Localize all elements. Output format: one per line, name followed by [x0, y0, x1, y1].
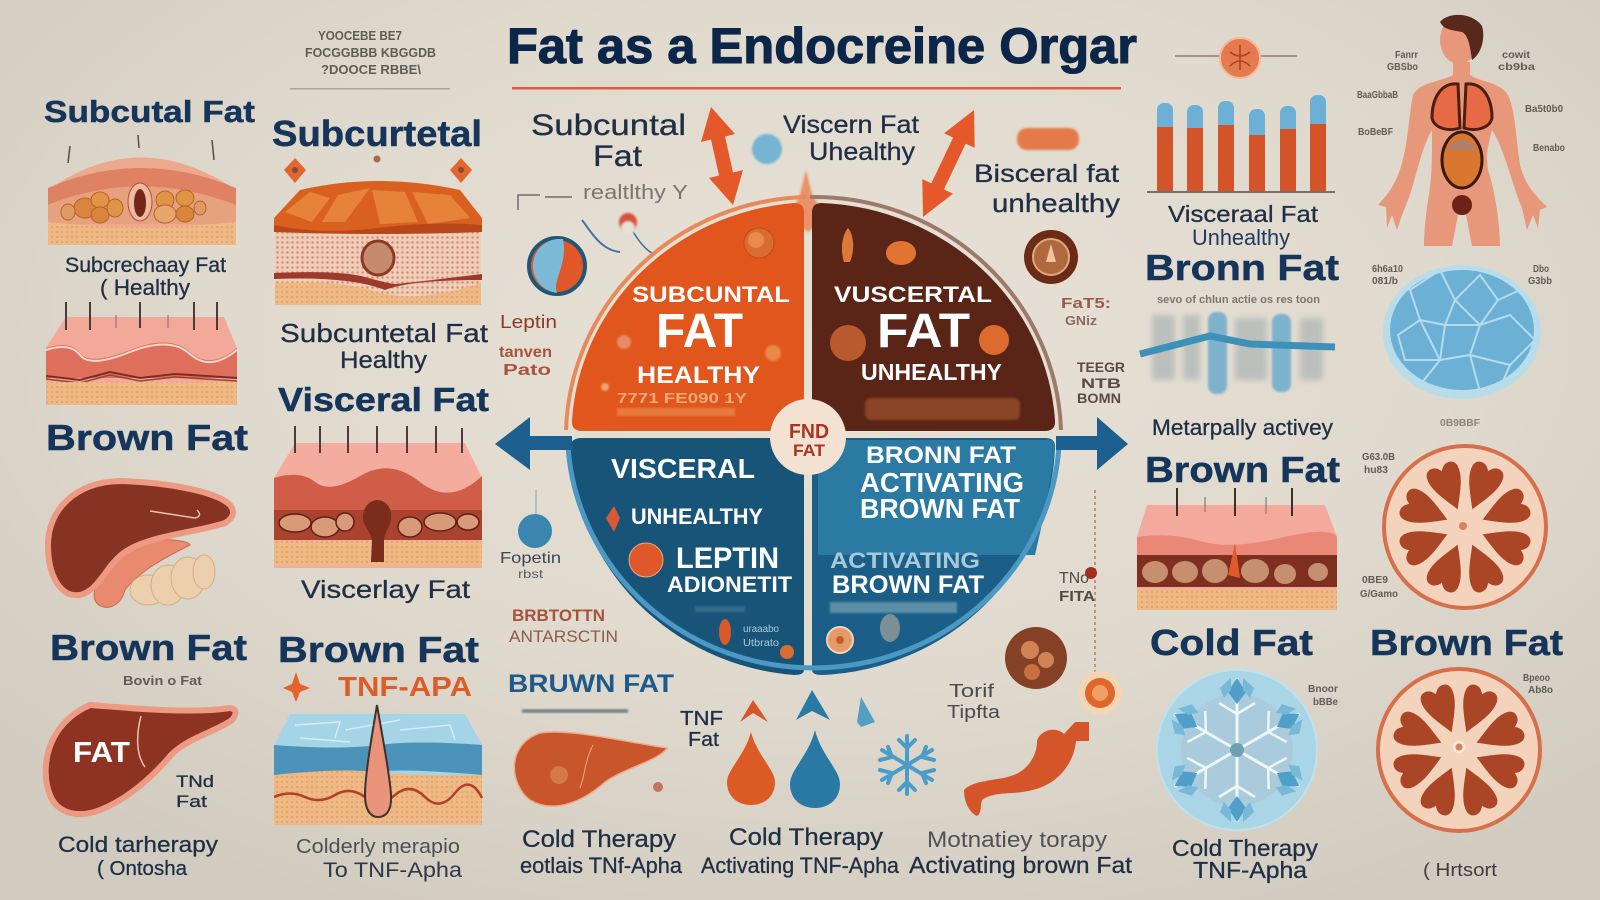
caption: To TNF-Apha — [323, 859, 462, 882]
ring top — [566, 197, 1061, 430]
small labels: citrus upper: hu83 — [1364, 465, 1388, 476]
line chart — [1140, 312, 1335, 394]
quadrant: brown fat activating: BROWN FAT — [832, 571, 984, 599]
panel: left column one — [44, 94, 255, 880]
small labels: snow disc: Bnoor — [1308, 684, 1338, 695]
label: tnf-apa — [283, 671, 472, 702]
small labels: figure: Fanrr — [1395, 50, 1418, 61]
small labels: blue cells: G3bb — [1528, 276, 1552, 287]
caption: metabolic therapy: Motnatiey torapy — [927, 827, 1107, 852]
labels: left leptin: Pato — [503, 362, 551, 379]
small labels: snow disc: Bpeoo — [1523, 673, 1550, 684]
caption: cold therapy — [58, 832, 218, 880]
caption: cold therapy one — [520, 826, 683, 878]
icon: orange liver — [514, 732, 667, 806]
icon: blue snowflake — [880, 736, 934, 794]
small labels: figure: cowit — [1502, 50, 1531, 61]
caption: Colderly merapio — [296, 836, 460, 858]
icon: blue and orange sphere — [529, 238, 585, 294]
icon: blue ball with label: Fopetin — [500, 550, 561, 567]
caption: Visceraal Fat — [1168, 201, 1319, 227]
caption — [296, 836, 462, 882]
label: torif tipfta — [947, 681, 1001, 722]
label: viscern fat: Uhealthy — [809, 138, 916, 166]
label: subcuntal fat — [531, 109, 686, 173]
icon: liver labelled fat: FAT — [73, 737, 130, 769]
small header text: YOOCEBE BE7 — [318, 28, 402, 43]
small header text — [290, 28, 450, 90]
small labels: blue cells: 081/b — [1372, 276, 1398, 287]
quadrant: subcuntal fat healthy: SUBCUNTAL — [632, 282, 790, 307]
label: viscern fat: Viscern Fat — [783, 111, 919, 139]
caption: ( Healthy — [100, 275, 190, 300]
caption: TNF-Apha — [1193, 857, 1307, 883]
panel: center top labels — [499, 107, 1125, 406]
icon: domed tissue cross-section — [48, 135, 236, 245]
labels: right fat notes: FaT5: — [1061, 295, 1111, 312]
center medallion — [770, 399, 846, 475]
heading: cold fat: Cold Fat — [1150, 622, 1313, 663]
icon: orange smudge — [1017, 128, 1079, 150]
quadrant: subcuntal fat healthy — [572, 203, 804, 431]
label: tnf-apa: TNF-APA — [338, 671, 472, 702]
small labels: blue cells: Dbo — [1533, 264, 1549, 275]
heading: visceral fat: Visceral Fat — [278, 381, 489, 418]
small label: tnd fat: TNd — [176, 772, 214, 791]
panel: right column one — [1137, 38, 1340, 883]
quadrant: brown fat activating: BRONN FAT — [866, 442, 1016, 469]
quadrant: brown fat activating — [812, 438, 1055, 675]
labels: right fat notes: NTB — [1081, 375, 1121, 391]
small labels: citrus upper: G63.0B — [1362, 452, 1395, 463]
labels: brotottin: BRBTOTTN — [512, 606, 605, 625]
caption: Subcrechaay Fat — [65, 254, 226, 277]
chart: central fat wheel — [566, 197, 1061, 675]
labels: right fat notes: BOMN — [1077, 390, 1121, 406]
label: subcuntal fat: Fat — [593, 140, 643, 173]
heading: bruwn fat: BRUWN FAT — [508, 670, 674, 698]
labels: left leptin — [499, 312, 557, 379]
caption — [1168, 201, 1319, 250]
icon: blue ball with label — [500, 490, 561, 581]
label: tnf fat: TNF — [680, 708, 723, 730]
center medallion: FAT — [793, 441, 826, 460]
small label: tnd fat — [176, 772, 214, 811]
icon: visceral tissue — [274, 426, 482, 568]
icon: blue ball with label: rbst — [518, 567, 544, 581]
icon: citrus-like fat section lower — [1378, 669, 1540, 831]
quadrant: viscertal fat unhealthy: FAT — [877, 305, 970, 358]
small label: Bovin o Fat — [123, 673, 203, 688]
heading: bronn fat: Bronn Fat — [1145, 247, 1339, 288]
quadrant: subcuntal fat healthy: HEALTHY — [637, 362, 760, 389]
small labels: blue cells — [1372, 264, 1552, 429]
quadrant: visceral unhealthy leptin: Utbrato — [743, 638, 779, 649]
icon: orange drop — [727, 732, 775, 805]
heading: brown fat: Brown Fat — [1145, 449, 1340, 490]
heading: brown fat: Brown Fat — [46, 417, 248, 458]
label: torif tipfta: Torif — [949, 681, 995, 701]
quadrant: viscertal fat unhealthy: UNHEALTHY — [861, 359, 1002, 385]
small labels: citrus upper: 0BE9 — [1362, 575, 1388, 586]
caption — [65, 254, 226, 300]
small labels: blue cells: 6h6a10 — [1372, 264, 1403, 275]
bar chart — [1147, 95, 1335, 193]
labels: right fat notes: GNiz — [1065, 313, 1098, 328]
quadrant: brown fat activating: BROWN FAT — [860, 493, 1020, 524]
small header text: FOCGGBBB KBGGDB — [305, 45, 436, 60]
icon: dotted stem with ring — [1059, 490, 1122, 715]
icon: blue fat cells — [1383, 265, 1541, 399]
caption: Metarpally activey — [1152, 415, 1333, 440]
faded healthy sketch — [518, 182, 688, 255]
quadrant: visceral unhealthy leptin: VISCERAL — [611, 453, 755, 484]
heading: subcutal fat: Subcutal Fat — [44, 94, 255, 129]
icon: tissue with hairs — [1137, 488, 1337, 610]
small header text: ?DOOCE RBBE\ — [321, 62, 421, 77]
small labels: snow disc: Ab8o — [1528, 685, 1553, 696]
panel: right column two — [1308, 15, 1565, 880]
small labels: citrus upper — [1360, 452, 1398, 600]
icon: orange tissue cross-section — [274, 181, 482, 305]
label: subcuntal fat: Subcuntal — [531, 109, 686, 142]
small labels: figure: Benabo — [1533, 143, 1565, 154]
quadrant: visceral unhealthy leptin: uraaabo — [743, 624, 779, 635]
faded healthy sketch: realtlthy Y — [583, 182, 688, 204]
icon: brown medallion lower — [1005, 627, 1067, 689]
title: Fat as a Endocreine Orgar — [507, 18, 1137, 74]
small labels: figure: BoBeBF — [1358, 127, 1393, 138]
caption: metabolic therapy — [909, 827, 1133, 878]
quadrant: viscertal fat unhealthy — [812, 203, 1055, 431]
small label: tnd fat: Fat — [176, 792, 207, 811]
quadrant: subcuntal fat healthy: FAT — [656, 305, 743, 358]
small labels: snow disc: bBBe — [1313, 697, 1338, 708]
caption: Viscerlay Fat — [301, 576, 470, 604]
caption — [1172, 835, 1319, 883]
labels: brotottin: ANTARSCTIN — [509, 627, 618, 646]
icon: human figure with organs — [1378, 15, 1547, 246]
heading: subcurtetal: Subcurtetal — [272, 113, 482, 154]
label: bisceral fat — [974, 160, 1120, 218]
small labels: snow disc — [1308, 673, 1553, 708]
icon: brown medallion — [1024, 230, 1078, 284]
heading: bruwn fat — [508, 670, 674, 713]
panel: center bottom — [500, 490, 1133, 878]
quadrant: visceral unhealthy leptin: LEPTIN — [676, 542, 779, 575]
icon: snowflake disc — [1157, 670, 1317, 830]
caption: cold therapy: Cold tarherapy — [58, 832, 218, 857]
label: tnf fat — [680, 708, 723, 751]
caption: cold therapy two: Activating TNF-Apha — [701, 853, 900, 878]
quadrant: viscertal fat unhealthy: VUSCERTAL — [834, 282, 992, 307]
heading: brown fat lower: Brown Fat — [50, 627, 247, 668]
caption: metabolic therapy: Activating brown Fat — [909, 852, 1133, 878]
label: bisceral fat: Bisceral fat — [974, 160, 1119, 188]
icon: skin layers — [46, 302, 237, 405]
arrow: double orange left — [701, 107, 743, 205]
small faded text: sevo of chlun actie os res toon — [1157, 294, 1320, 306]
icon: liver labelled fat — [46, 705, 236, 814]
small labels: figure: cb9ba — [1498, 62, 1536, 73]
heading: brown fat: Brown Fat — [278, 629, 479, 670]
quadrant: brown fat activating: ACTIVATING — [830, 548, 980, 573]
panel: left column two — [272, 28, 489, 882]
quadrant: visceral unhealthy leptin: UNHEALTHY — [631, 504, 763, 529]
quadrant: visceral unhealthy leptin: ADIONETIT — [667, 572, 793, 597]
icon: liver with lobe and fat — [48, 481, 233, 607]
caption: Subcuntetal Fat — [280, 318, 489, 348]
quadrant: subcuntal fat healthy: 7771 FE090 1Y — [617, 390, 747, 407]
caption: ( Hrtsort — [1423, 860, 1497, 880]
arrow: double orange right — [922, 110, 975, 217]
caption: cold therapy one: Cold Therapy — [522, 826, 676, 853]
small labels: blue cells: 0B9BBF — [1440, 418, 1480, 429]
caption: cold therapy two: Cold Therapy — [729, 824, 883, 851]
caption: cold therapy: ( Ontosha — [97, 858, 188, 880]
quadrant: visceral unhealthy leptin — [570, 438, 804, 675]
labels: left leptin: Leptin — [500, 312, 557, 332]
icon: top ring — [1175, 38, 1297, 78]
caption — [280, 318, 489, 374]
icon: orange markers — [284, 156, 472, 183]
arrow: blue left — [495, 417, 572, 470]
ring bottom — [568, 446, 1059, 668]
small labels: figure: Ba5t0b0 — [1525, 104, 1563, 115]
caption: cold therapy one: eotlais TNf-Apha — [520, 853, 683, 878]
icon: stomach — [964, 722, 1089, 816]
label: tnf fat: Fat — [688, 729, 719, 751]
center medallion: FND — [789, 421, 829, 443]
label: torif tipfta: Tipfta — [947, 702, 1001, 722]
labels: right fat notes: TEEGR — [1077, 359, 1125, 375]
labels: left leptin: tanven — [499, 344, 552, 361]
small labels: figure — [1357, 50, 1565, 154]
caption: Cold Therapy — [1172, 835, 1319, 861]
labels: right fat notes — [1061, 295, 1125, 406]
labels: brotottin — [509, 606, 618, 646]
caption: Healthy — [340, 347, 427, 374]
heading: brown fat: Brown Fat — [1370, 622, 1563, 663]
icon: cold tissue with follicle — [274, 705, 482, 825]
arrow: blue right — [1056, 417, 1128, 470]
icon: blue smudge — [752, 134, 782, 164]
small labels: figure: GBSbo — [1387, 62, 1418, 73]
icon: blue drop — [790, 730, 840, 808]
caption: Unhealthy — [1192, 225, 1290, 250]
caption: cold therapy two — [701, 824, 900, 878]
label: viscern fat — [783, 111, 919, 166]
quadrant: brown fat activating: ACTIVATING — [860, 467, 1024, 498]
icon: dotted stem with ring: TNo — [1059, 570, 1089, 587]
icon: dotted stem with ring: FITA — [1059, 588, 1095, 605]
label: bisceral fat: unhealthy — [992, 188, 1120, 218]
arrows: small up — [740, 690, 875, 727]
small labels: citrus upper: G/Gamo — [1360, 589, 1398, 600]
icon: citrus-like fat section upper — [1384, 446, 1546, 608]
small labels: figure: BaaGbbaB — [1357, 90, 1398, 101]
icon: orange spike — [790, 170, 826, 232]
